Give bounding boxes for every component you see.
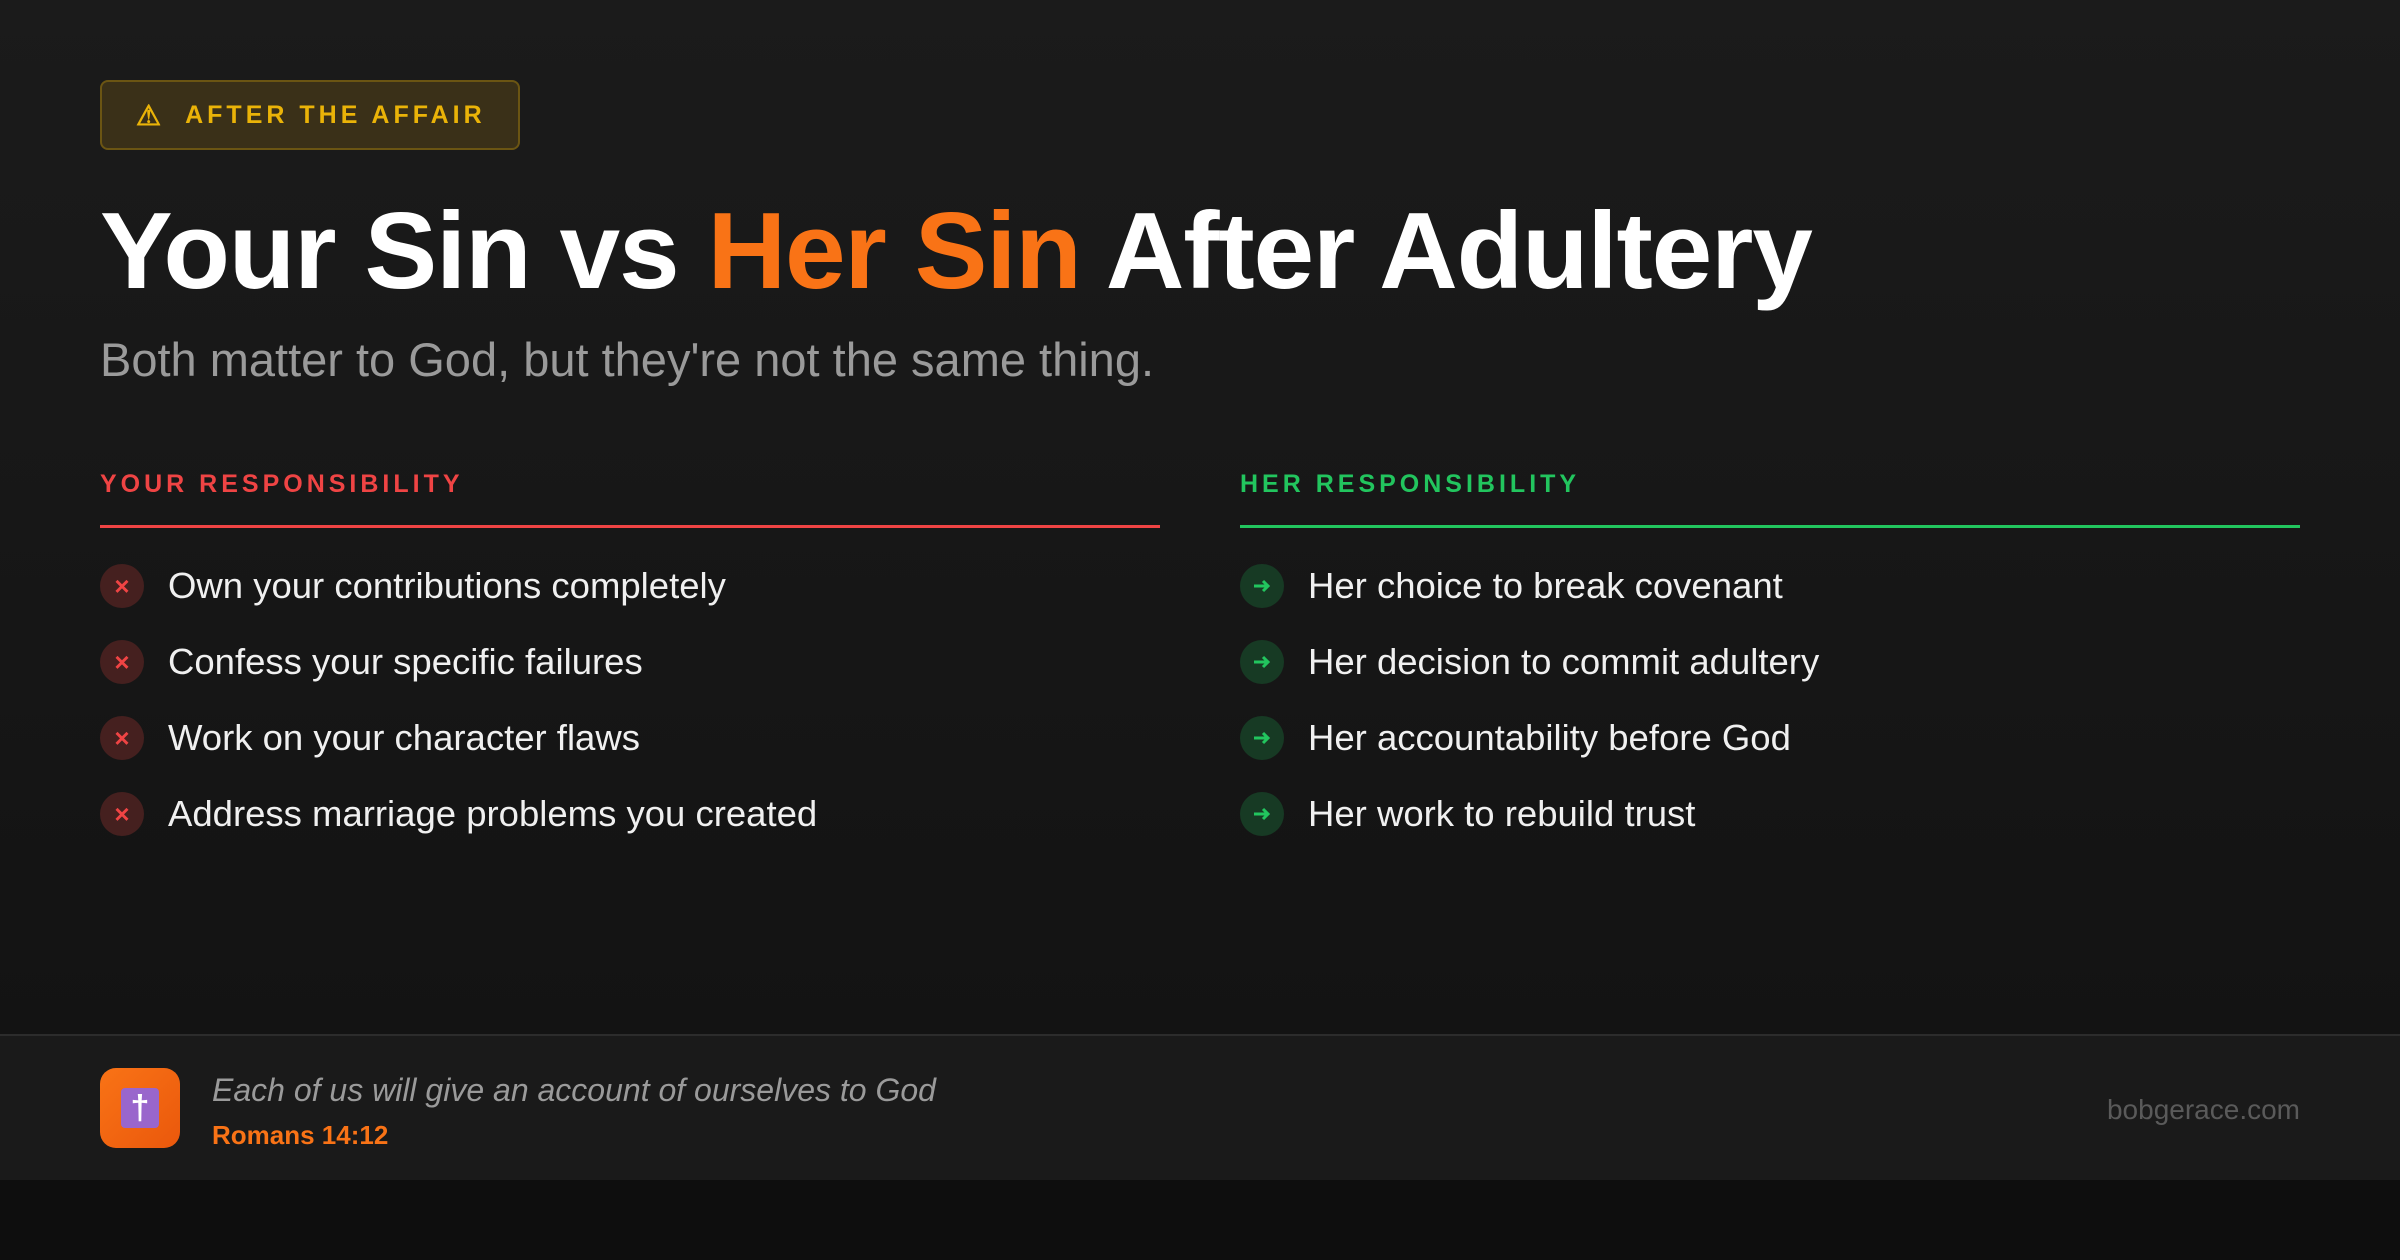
item: Work on your character flaws (168, 717, 640, 758)
item: × (114, 570, 130, 600)
item: Address marriage problems you created (168, 793, 817, 834)
title: Your Sin vs Her Sin After Adultery (100, 190, 1812, 312)
item: × (114, 722, 130, 752)
site: bobgerace.com (2107, 1094, 2300, 1125)
item: Her decision to commit adultery (1308, 641, 1819, 682)
item: Her choice to break covenant (1308, 565, 1783, 606)
panel: your responsibility (100, 470, 1160, 836)
heading: your responsibility: YOUR RESPONSIBILITY (100, 470, 464, 498)
item: Confess your specific failures (168, 641, 643, 682)
badge (100, 80, 520, 150)
item: × (114, 798, 130, 828)
item: Her accountability before God (1308, 717, 1791, 758)
quote: Each of us will give an account of ourselves to God (212, 1072, 936, 1108)
panel: her responsibility (1240, 470, 2300, 836)
icon: cross (100, 1068, 180, 1148)
badge: ⚠ (136, 100, 165, 130)
badge: AFTER THE AFFAIR (185, 100, 486, 128)
item: Her work to rebuild trust (1308, 793, 1695, 834)
item: Own your contributions completely (168, 565, 726, 606)
icon: cross: † (131, 1089, 149, 1127)
subtitle: Both matter to God, but they're not the same thing. (100, 333, 1154, 386)
reference: Romans 14:12 (212, 1120, 388, 1150)
footer (0, 1034, 2400, 1180)
heading: her responsibility: HER RESPONSIBILITY (1240, 470, 1580, 498)
item: × (114, 646, 130, 676)
